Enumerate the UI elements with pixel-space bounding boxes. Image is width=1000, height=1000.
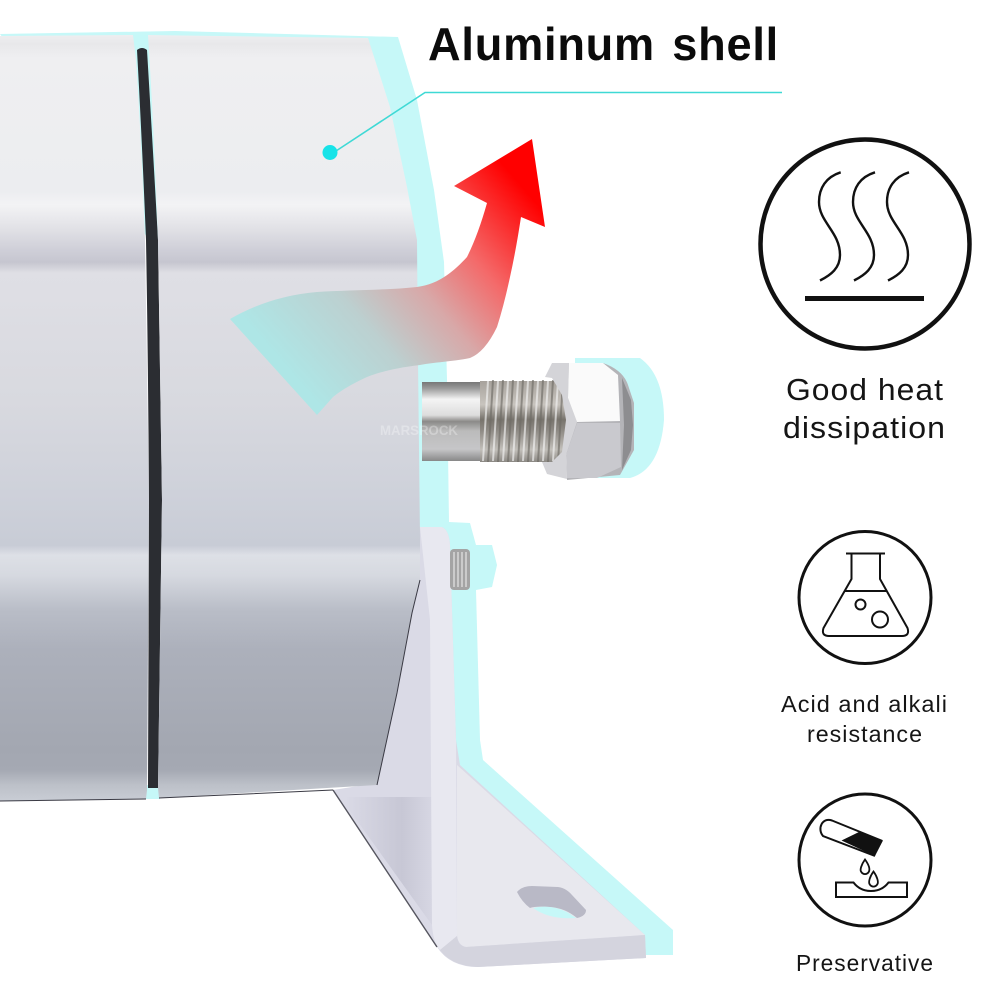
rubber seal band — [137, 48, 162, 788]
motor bracket — [333, 527, 646, 967]
bracket foot top face — [457, 765, 645, 947]
bracket left shadow edge — [333, 790, 437, 947]
motor body: front block — [148, 35, 420, 798]
slot cyan opening — [533, 907, 576, 918]
callout leader line — [322, 92, 782, 160]
bracket foot front edge — [440, 935, 646, 967]
bolt thread — [480, 380, 566, 462]
label: acid and alkali resistance: Acid and alkali — [781, 691, 948, 717]
bolt — [422, 363, 634, 480]
label: good heat dissipation: dissipation — [783, 410, 946, 445]
icon: preservative — [799, 794, 931, 926]
label: acid and alkali resistance: resistance — [807, 721, 923, 747]
flask liquid line — [844, 590, 887, 592]
watermark: MARSROCK — [380, 422, 458, 438]
cyan offset shadow — [0, 31, 673, 955]
mounting slot — [517, 886, 586, 918]
label: good heat dissipation — [783, 372, 946, 445]
motor body: rear block — [0, 35, 149, 801]
callout dot — [322, 145, 338, 160]
hex nut — [542, 363, 634, 480]
heat waves — [819, 172, 841, 280]
test tube liquid — [842, 832, 883, 856]
corroded surface — [836, 882, 907, 897]
icon: flask — [799, 532, 931, 664]
label: preservative: Preservative — [796, 950, 934, 976]
body outline lower edge — [0, 580, 420, 801]
bracket front plate — [420, 527, 457, 950]
heat surface — [805, 296, 924, 301]
icon: heat dissipation — [760, 140, 970, 348]
label: good heat dissipation: Good heat — [786, 372, 944, 407]
bolt shaft — [422, 382, 482, 461]
small bracket screw — [450, 549, 470, 590]
label: acid and alkali resistance — [781, 691, 948, 747]
flask body — [823, 554, 908, 636]
bracket side wall — [333, 527, 646, 967]
bracket side shading — [340, 797, 432, 925]
heat flow arrow — [230, 139, 545, 415]
title: Aluminum shell — [428, 18, 779, 70]
test tube — [820, 820, 882, 856]
drops — [861, 860, 869, 874]
